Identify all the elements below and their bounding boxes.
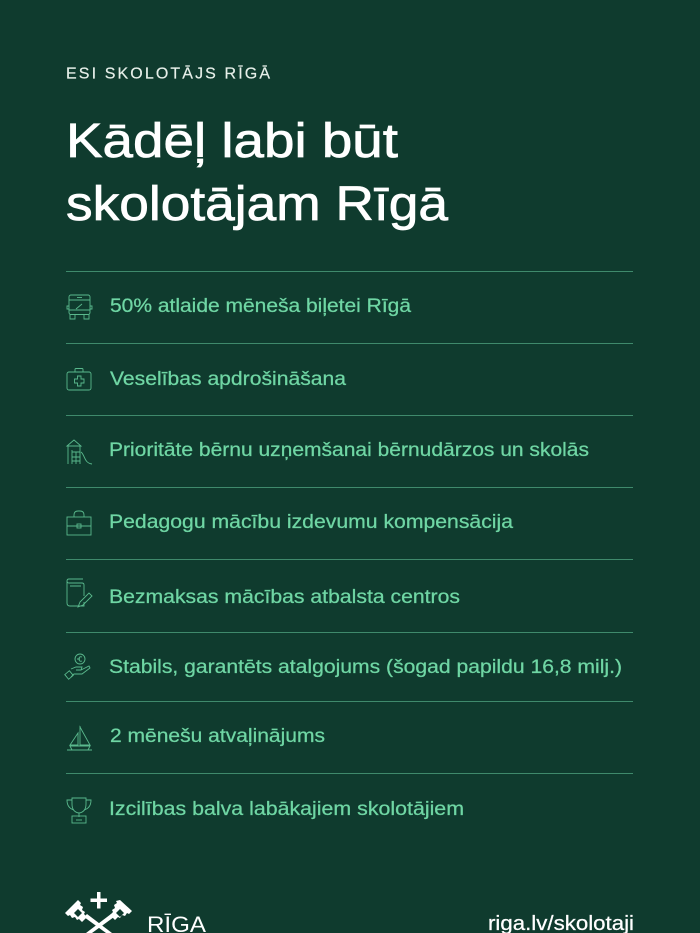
title: Kādēļ labi būt (66, 115, 398, 168)
benefit 3: kindergarten priority: Prioritāte bērnu uzņemšanai bērnudārzos un skolās (109, 439, 589, 461)
benefit 7: two months of vacation (67, 725, 325, 750)
icon: playground slide (67, 440, 92, 464)
logo: Riga crossed keys (65, 892, 206, 933)
title (66, 115, 448, 231)
benefit 5: free support centres (67, 579, 460, 608)
benefit 7: two months of vacation: 2 mēnešu atvaļinājums (110, 725, 325, 747)
icon: book and pencil (67, 579, 92, 607)
icon: sailboat (67, 726, 92, 750)
icon: trophy (67, 798, 91, 823)
icon: bus (67, 295, 92, 319)
icon: first aid case (67, 368, 91, 390)
title: skolotājam Rīgā (66, 178, 448, 231)
icon: briefcase (67, 511, 91, 535)
eyebrow heading: ESI SKOLOTĀJS RĪGĀ (66, 64, 270, 82)
benefit 2: health insurance: Veselības apdrošināšana (110, 368, 346, 390)
benefit 6: stable salary: Stabils, garantēts atalgojums (šogad papildu 16,8 milj.) (109, 656, 622, 678)
benefit 8: excellence award: Izcilības balva labākajiem skolotājiem (109, 798, 464, 820)
benefit 1: transport discount: 50% atlaide mēneša biļetei Rīgā (110, 295, 411, 317)
icon: hand with euro coin (65, 654, 90, 679)
benefit 5: free support centres: Bezmaksas mācības atbalsta centros (109, 586, 460, 608)
benefit 4: teaching materials: Pedagogu mācību izdevumu kompensācija (109, 511, 513, 533)
